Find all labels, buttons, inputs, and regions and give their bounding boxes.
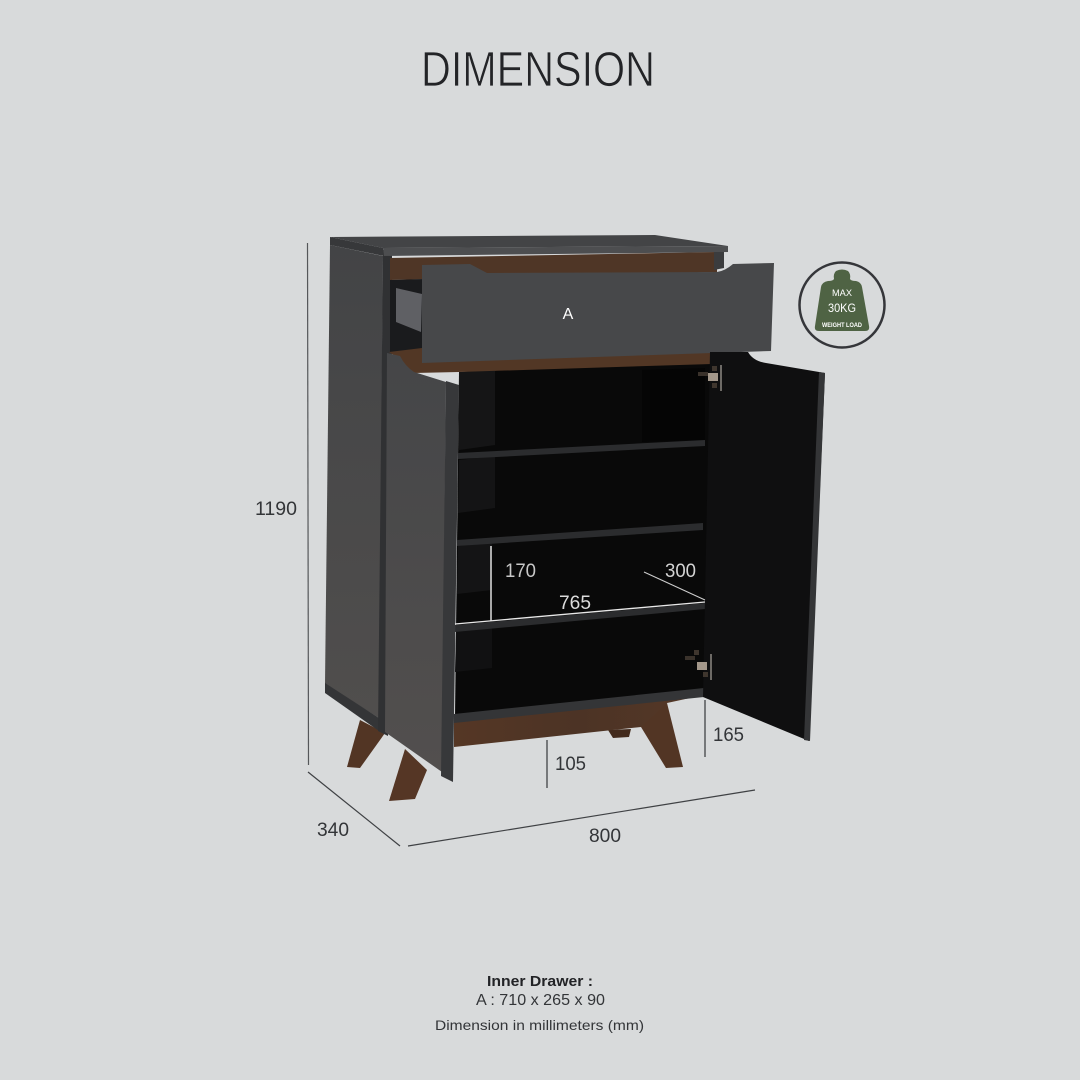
width dimension 800: 800 (589, 826, 621, 847)
shoe cabinet illustration (325, 235, 825, 801)
depth dimension 340 (308, 772, 400, 846)
clearance dimension 165 (705, 700, 744, 757)
leg height dimension 105: 105 (555, 754, 586, 775)
inner drawer note (435, 973, 644, 1033)
front column (378, 250, 392, 736)
interior dimension: shelf width 765 (455, 593, 705, 624)
right door (703, 352, 825, 741)
right leg (640, 703, 683, 768)
inner drawer note: A : 710 x 265 x 90 (476, 992, 605, 1009)
depth dimension 340: 340 (317, 820, 349, 841)
title: DIMENSION (421, 43, 655, 97)
back left leg (347, 720, 385, 768)
drawer front (422, 263, 774, 363)
shelves (454, 440, 705, 723)
weight load badge (800, 262, 884, 348)
front left leg (389, 749, 427, 801)
wood rail under drawer (389, 340, 712, 373)
interior of cabinet (455, 362, 712, 716)
weight load badge: MAX (832, 288, 852, 298)
weight load badge: WEIGHT LOAD (822, 322, 862, 329)
base wood rail (454, 695, 704, 747)
back centre leg (608, 729, 631, 738)
drawer opening (390, 279, 424, 352)
bottom hinge (685, 650, 712, 680)
top hinge (698, 365, 722, 391)
weight load badge: 30KG (828, 301, 856, 315)
width dimension 800 (408, 790, 755, 847)
side panel (325, 245, 383, 718)
interior dimension: shelf height 170: 170 (505, 561, 536, 582)
worktop (330, 235, 728, 256)
interior dimension: shelf width 765: 765 (559, 593, 591, 614)
drawer label: A (563, 306, 574, 323)
height dimension 1190: 1190 (255, 499, 297, 520)
interior dimension: shelf height 170 (491, 546, 536, 621)
upper wood back (390, 252, 717, 280)
interior dimension: shelf depth 300: 300 (665, 561, 696, 582)
leg height dimension 105 (547, 740, 586, 788)
left door (385, 353, 459, 782)
clearance dimension 165: 165 (713, 725, 744, 746)
interior dimension: shelf depth 300 (644, 561, 705, 600)
icon: weight (815, 270, 869, 331)
inner drawer note: Inner Drawer : (487, 973, 593, 990)
inner drawer note: Dimension in millimeters (mm) (435, 1017, 644, 1033)
